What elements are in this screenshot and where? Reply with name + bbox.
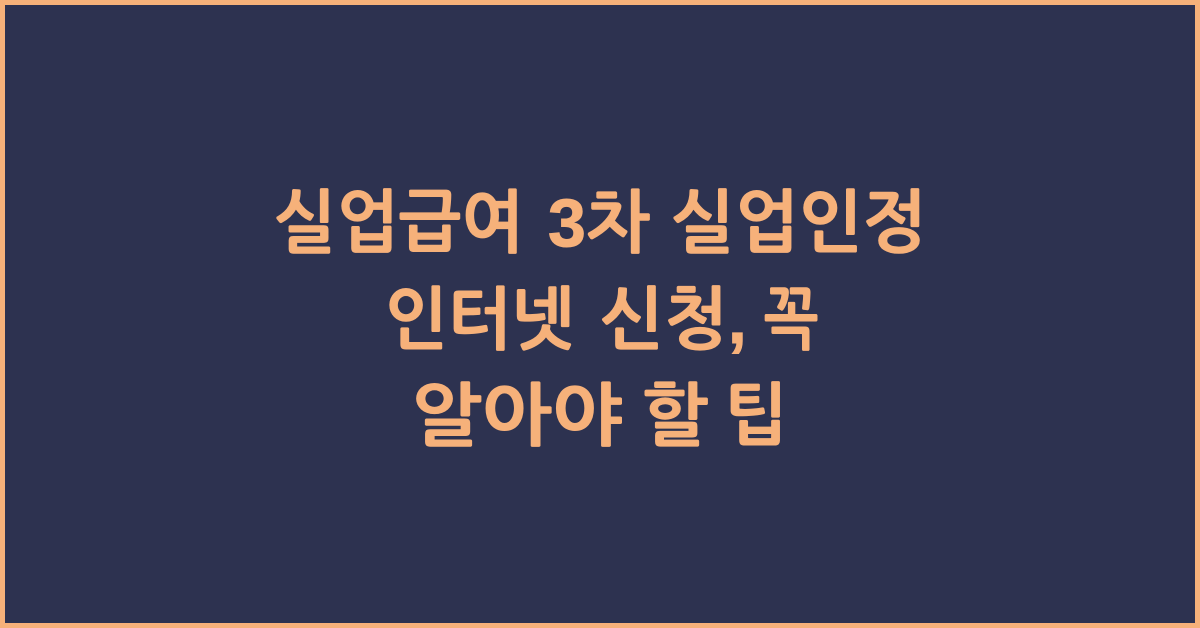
title [274,185,927,454]
title: 팁 [724,378,788,454]
title: 인터넷 [385,282,574,358]
title: 신청, [600,282,747,358]
title: 할 [642,378,708,454]
title: 알아야 [411,378,622,454]
title: 3차 [548,185,650,261]
title: 실업인정 [671,185,927,261]
title: 실업급여 [274,185,524,261]
title: 꼭 [764,282,818,358]
